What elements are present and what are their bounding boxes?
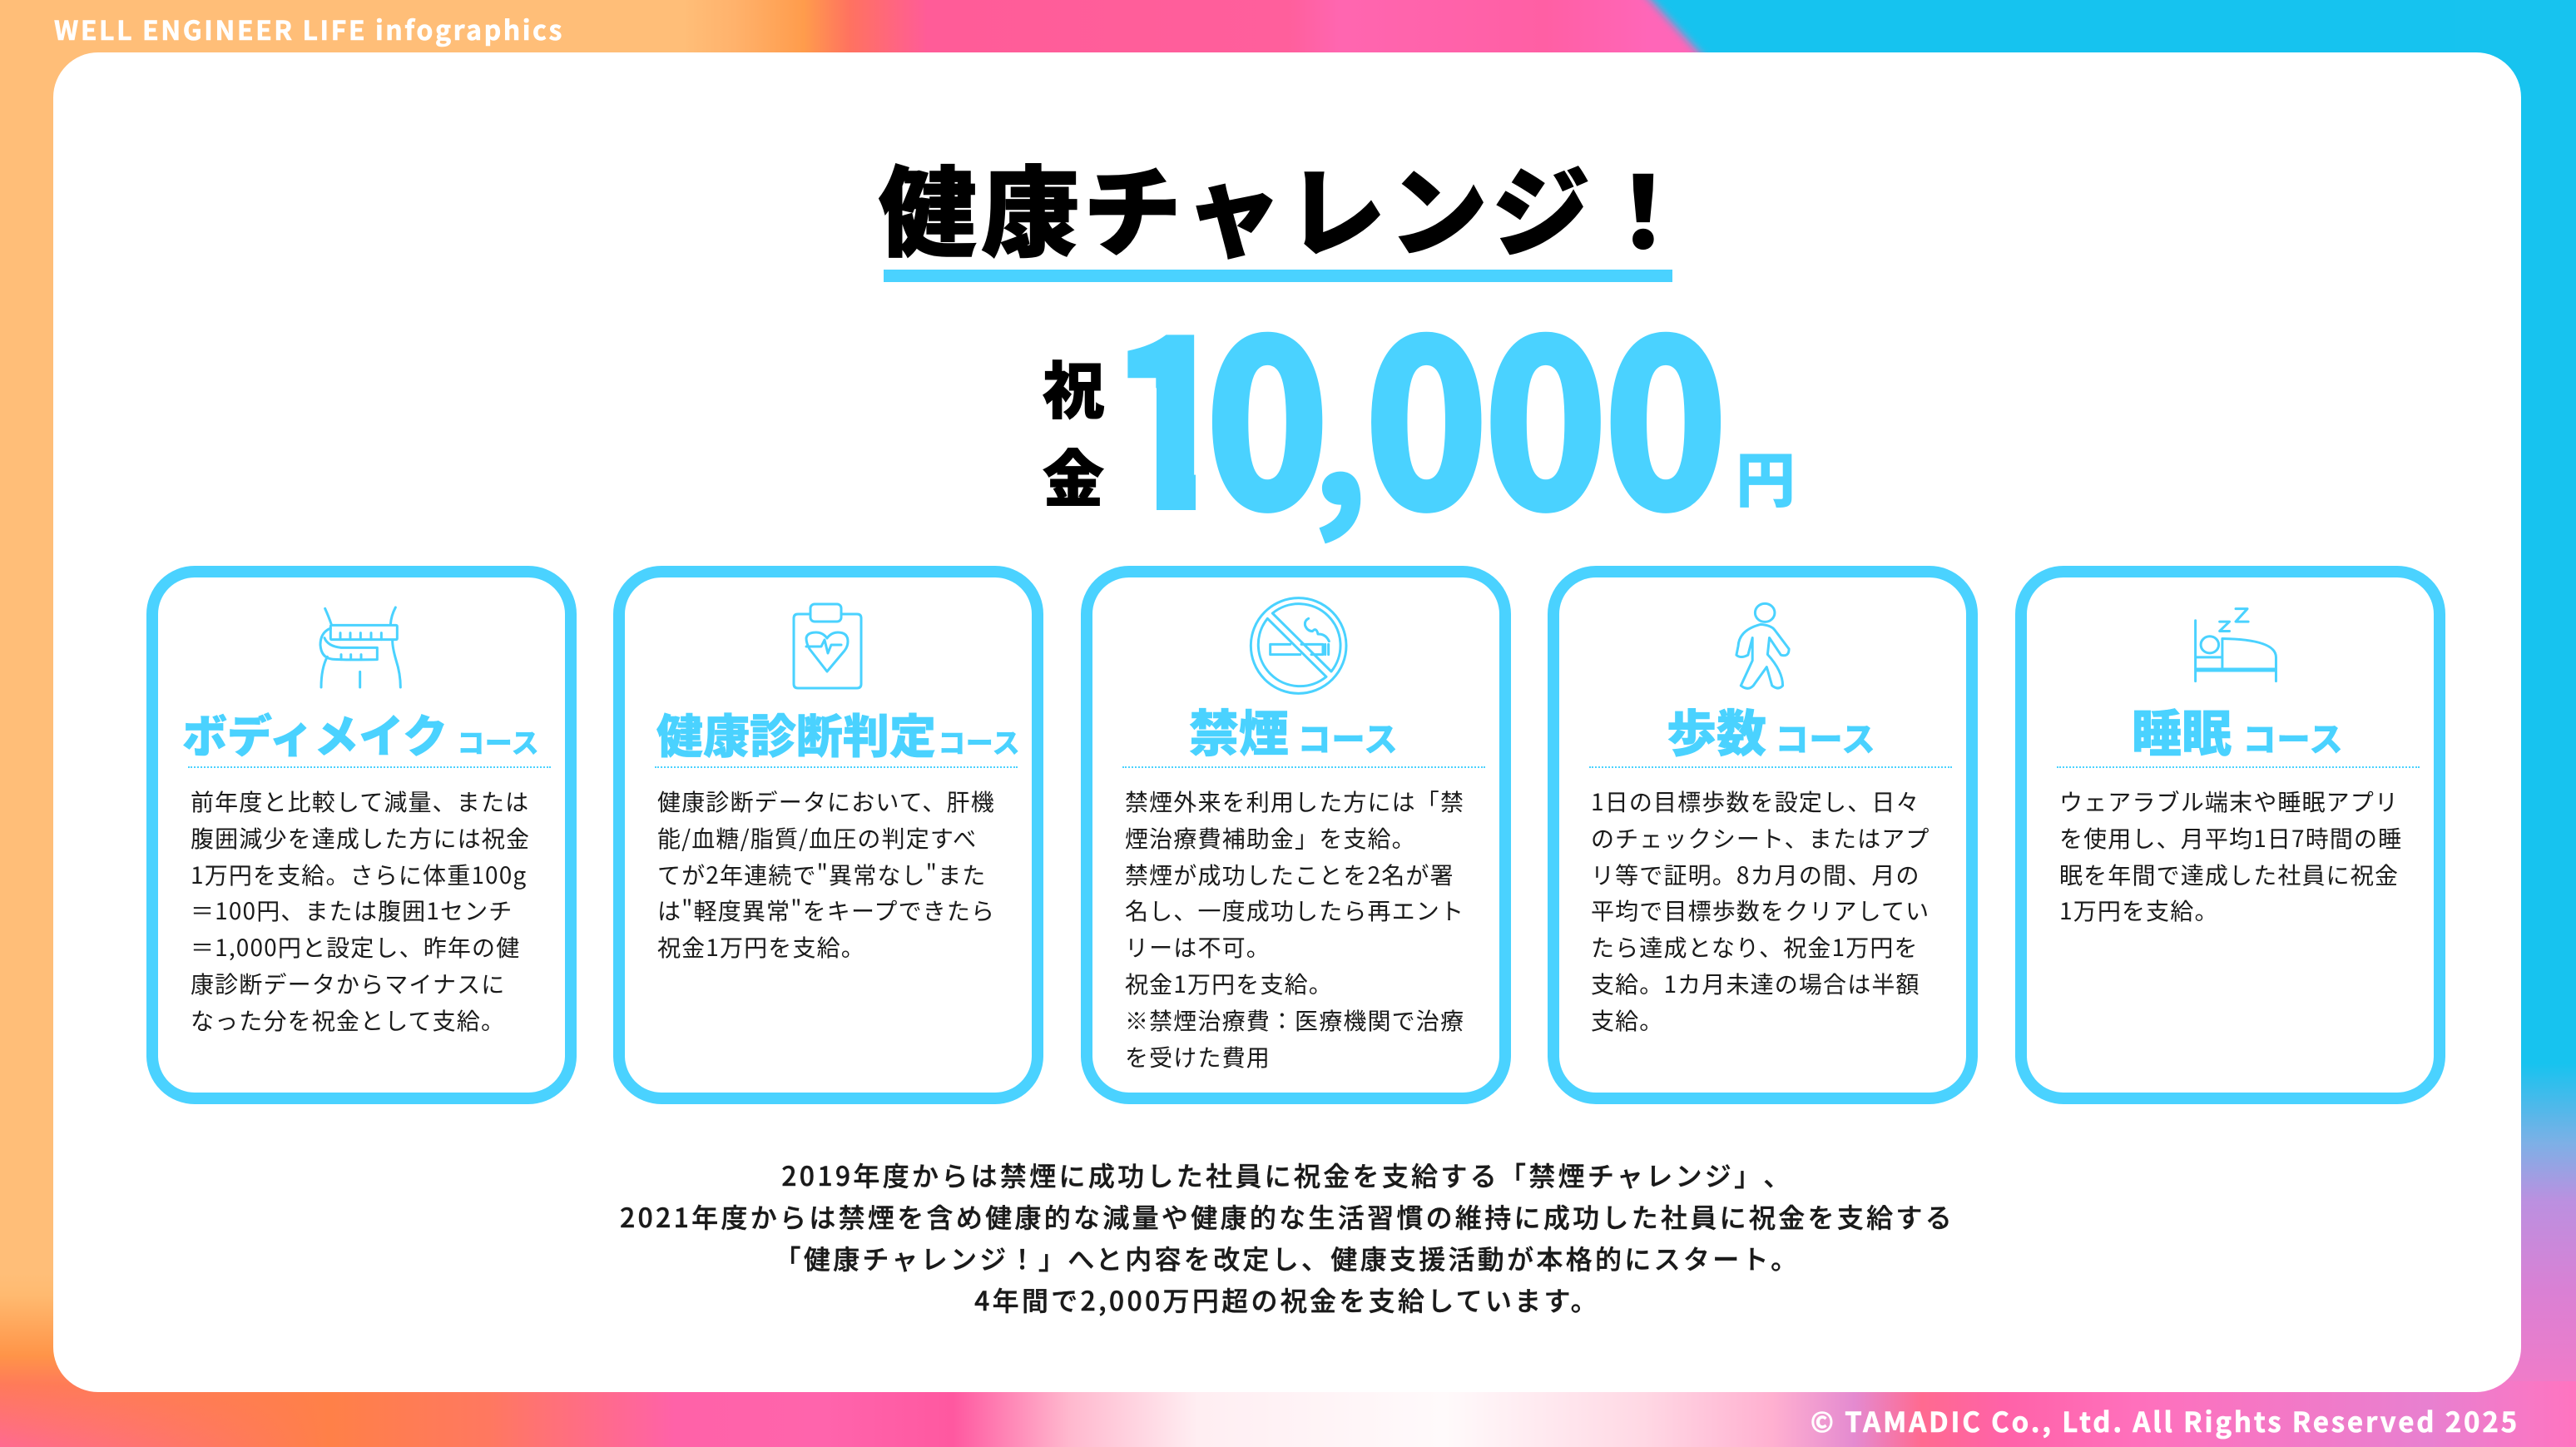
description: 禁煙外来を利用した方には「禁 [1125,785,1464,818]
description: 健康診断データにおいて、肝機 [657,785,995,818]
amount number: , [1310,313,1369,554]
icon: sleeping in bed [2194,607,2277,682]
description: 平均で目標歩数をクリアしてい [1591,894,1930,927]
header label: WELL ENGINEER LIFE infographics [54,10,564,48]
description: 禁煙が成功したことを2名が署 [1125,858,1454,891]
description: なった分を祝金として支給。 [191,1003,505,1037]
description: 腹囲減少を達成した方には祝金 [191,821,530,855]
description: リーは不可。 [1125,930,1271,964]
description: 能/血糖/脂質/血圧の判定すべ [657,821,977,855]
card: 睡眠 [2015,566,2445,1104]
description: ウェアラブル端末や睡眠アプリ [2059,785,2399,818]
description: を受けた費用 [1125,1040,1271,1073]
description: を使用し、月平均1日7時間の睡 [2059,821,2402,855]
description: 前年度と比較して減量、または [191,785,529,818]
description: たら達成となり、祝金1万円を [1591,930,1919,964]
icon: walking person [1735,602,1791,690]
unit 円: 円 [1736,432,1796,519]
description [191,785,530,1037]
description: 煙治療費補助金」を支給。 [1125,821,1416,855]
card: ボディメイク [146,566,577,1104]
heading: 睡眠 [2132,694,2232,766]
heading: 健康診断判定 [656,700,936,767]
amount number: 1 [1108,240,1234,577]
description: リ等で証明。8カ月の間、月の [1591,858,1920,891]
description: 名し、一度成功したら再エント [1125,894,1464,927]
bottom paragraph: 「健康チャレンジ！」へと内容を改定し、健康支援活動が本格的にスタート。 [775,1239,1800,1277]
prize amount [1043,240,1796,577]
heading: ボディメイク [182,700,448,766]
description: 1日の目標歩数を設定し、日々 [1591,785,1920,818]
icon: no smoking [1250,597,1348,695]
description: 支給。 [1591,1003,1663,1037]
bottom paragraph: 4年間で2,000万円超の祝金を支給しています。 [974,1281,1600,1319]
sub heading: コース [2242,711,2343,761]
heading: 歩数 [1667,694,1766,766]
description: ＝100円、または腹囲1センチ [191,894,513,927]
footer copyright: © TAMADIC Co., Ltd. All Rights Reserved 2025 [1811,1400,2519,1440]
icon: clipboard heart [792,602,862,689]
sub heading: コース [1297,711,1398,761]
description [657,785,995,964]
card: 健康診断判定 [613,566,1043,1104]
description: 康診断データからマイナスに [191,967,505,1000]
label: 祝金: 祝 [1043,342,1104,431]
label: 祝金: 金 [1043,430,1104,519]
description: 1万円を支給。 [2059,894,2219,927]
description: てが2年連続で"異常なし"また [657,858,986,891]
bottom paragraph: 2021年度からは禁煙を含め健康的な減量や健康的な生活習慣の維持に成功した社員に祝金を支給する [620,1197,1954,1236]
card: 歩数 [1548,566,1978,1104]
description [1125,785,1464,1073]
card: 禁煙 [1081,566,1511,1104]
title: 健康チャレンジ！ [879,134,1697,276]
description: ※禁煙治療費：医療機関で治療 [1125,1003,1464,1037]
description: は"軽度異常"をキープできたら [657,894,995,927]
bottom paragraph: 2019年度からは禁煙に成功した社員に祝金を支給する「禁煙チャレンジ」、 [781,1156,1793,1194]
amount number: 0000 [1205,240,1728,577]
description: 眠を年間で達成した社員に祝金 [2059,858,2399,891]
sub heading: コース [457,721,539,761]
sub heading: コース [1775,711,1875,761]
title underline [884,270,1672,282]
description: 支給。1カ月未達の場合は半額 [1591,967,1920,1000]
icon: waist measure [320,606,402,689]
heading: 禁煙 [1189,694,1289,766]
description: 祝金1万円を支給。 [657,930,865,964]
label: 祝金 [1043,342,1105,519]
description [2059,785,2402,927]
description [1591,785,1930,1037]
description: ＝1,000円と設定し、昨年の健 [191,930,520,964]
description: のチェックシート、またはアプ [1591,821,1930,855]
description: 祝金1万円を支給。 [1125,967,1333,1000]
bottom paragraph [620,1156,1954,1319]
description: 1万円を支給。さらに体重100g [191,858,527,891]
sub heading: コース [938,721,1020,761]
